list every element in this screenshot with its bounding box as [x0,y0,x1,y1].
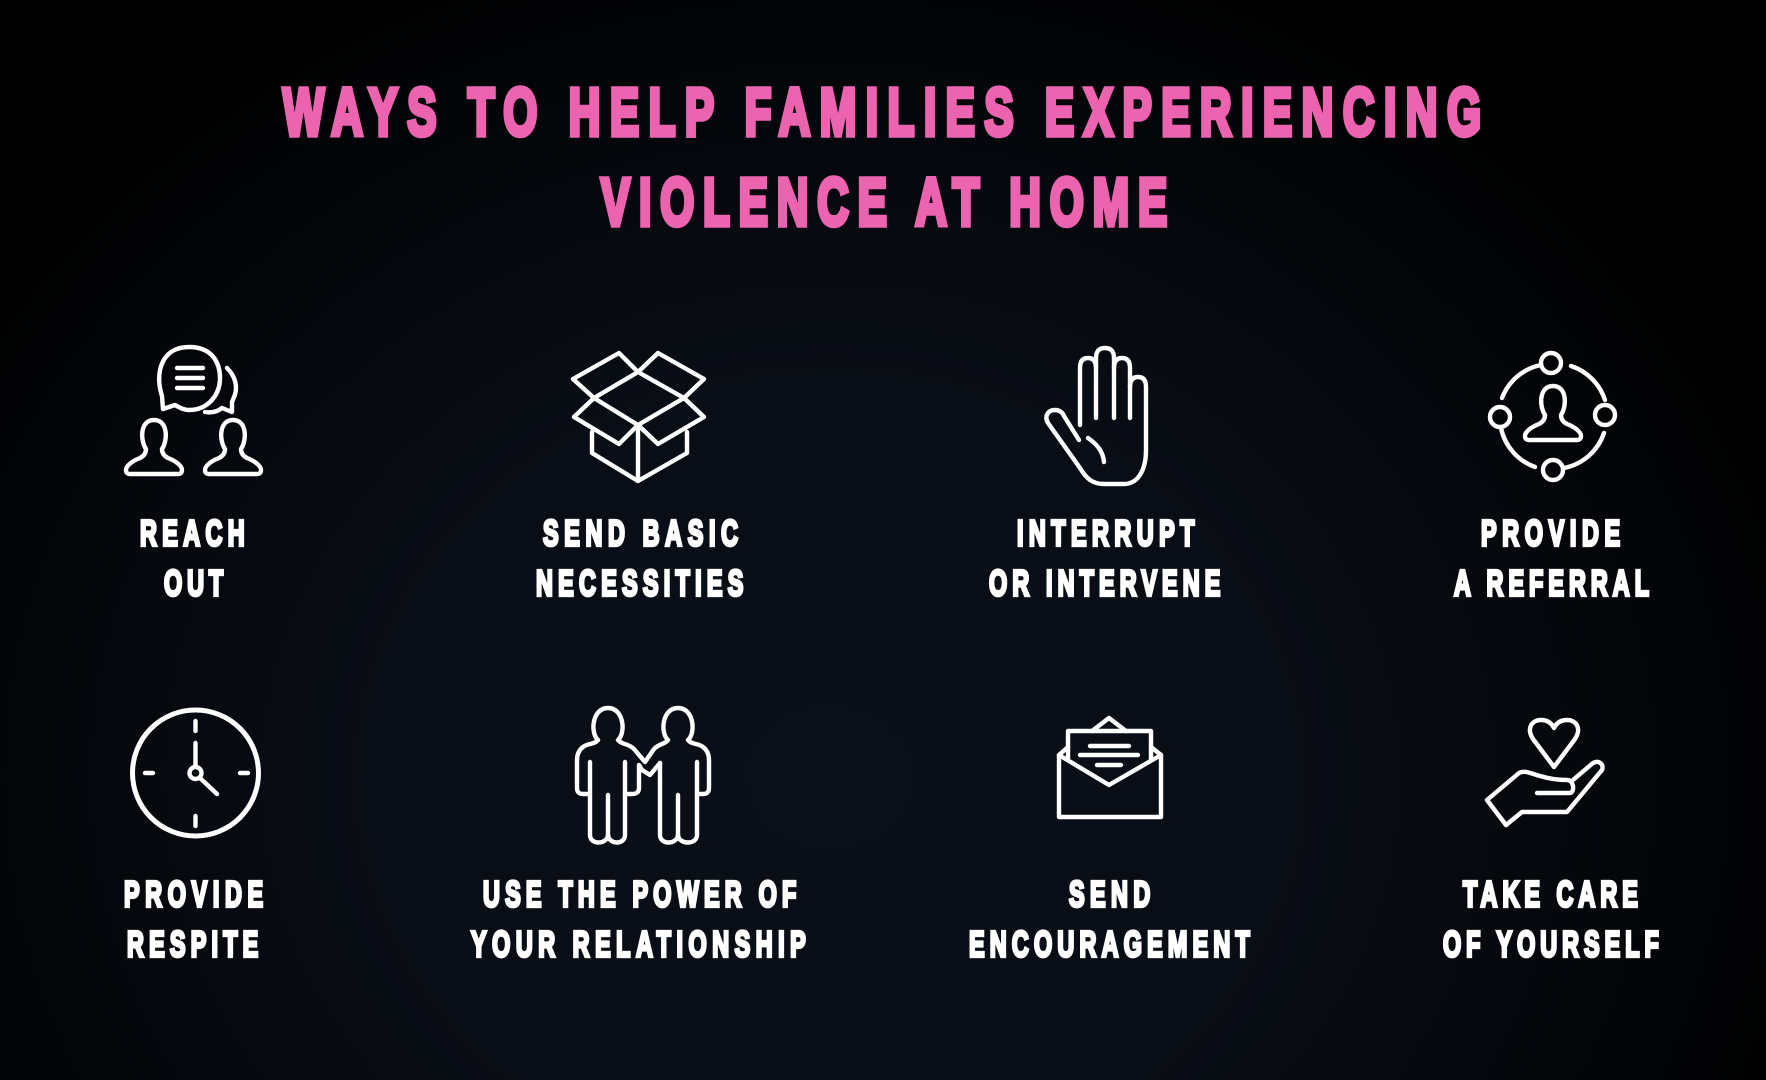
label [989,515,1220,604]
item: interrupt or intervene [989,348,1220,604]
title [283,75,1481,239]
label: YOUR RELATIONSHIP [471,926,806,965]
label: SEND BASIC [543,515,738,554]
label: OR INTERVENE [989,565,1220,604]
label [1454,515,1649,604]
item: reach out [126,347,261,604]
label: SEND [1069,876,1150,915]
icon: raised hand [1046,348,1146,484]
label: TAKE CARE [1463,876,1638,915]
item: provide a referral [1454,353,1649,604]
item: use the power of your relationship [471,708,806,965]
label [471,876,806,965]
icon: open box [573,353,704,481]
label [1443,876,1659,965]
label: OF YOURSELF [1443,926,1659,965]
label: A REFERRAL [1454,565,1649,604]
label: INTERRUPT [1017,515,1195,554]
item: send basic necessities [536,353,743,604]
item: provide respite [124,710,263,965]
title: WAYS TO HELP FAMILIES EXPERIENCING [283,75,1481,149]
label: USE THE POWER OF [483,876,796,915]
label: PROVIDE [1481,515,1620,554]
label [140,515,245,604]
icon: open envelope with letter [1059,718,1161,817]
label: REACH [140,515,245,554]
label: RESPITE [127,926,258,965]
item: send encouragement [969,718,1250,965]
label: ENCOURAGEMENT [969,926,1250,965]
title: VIOLENCE AT HOME [601,165,1167,239]
label: NECESSITIES [536,565,743,604]
icon: person in circle of nodes [1490,353,1615,480]
icon: two people holding hands [577,708,709,842]
icon: clock [132,710,258,836]
label [124,876,263,965]
item: take care of yourself [1443,720,1659,965]
label: OUT [164,565,223,604]
label: PROVIDE [124,876,263,915]
label [969,876,1250,965]
label [536,515,743,604]
icon: speech bubbles and two people [126,347,261,474]
icon: heart above open hand [1487,720,1602,825]
